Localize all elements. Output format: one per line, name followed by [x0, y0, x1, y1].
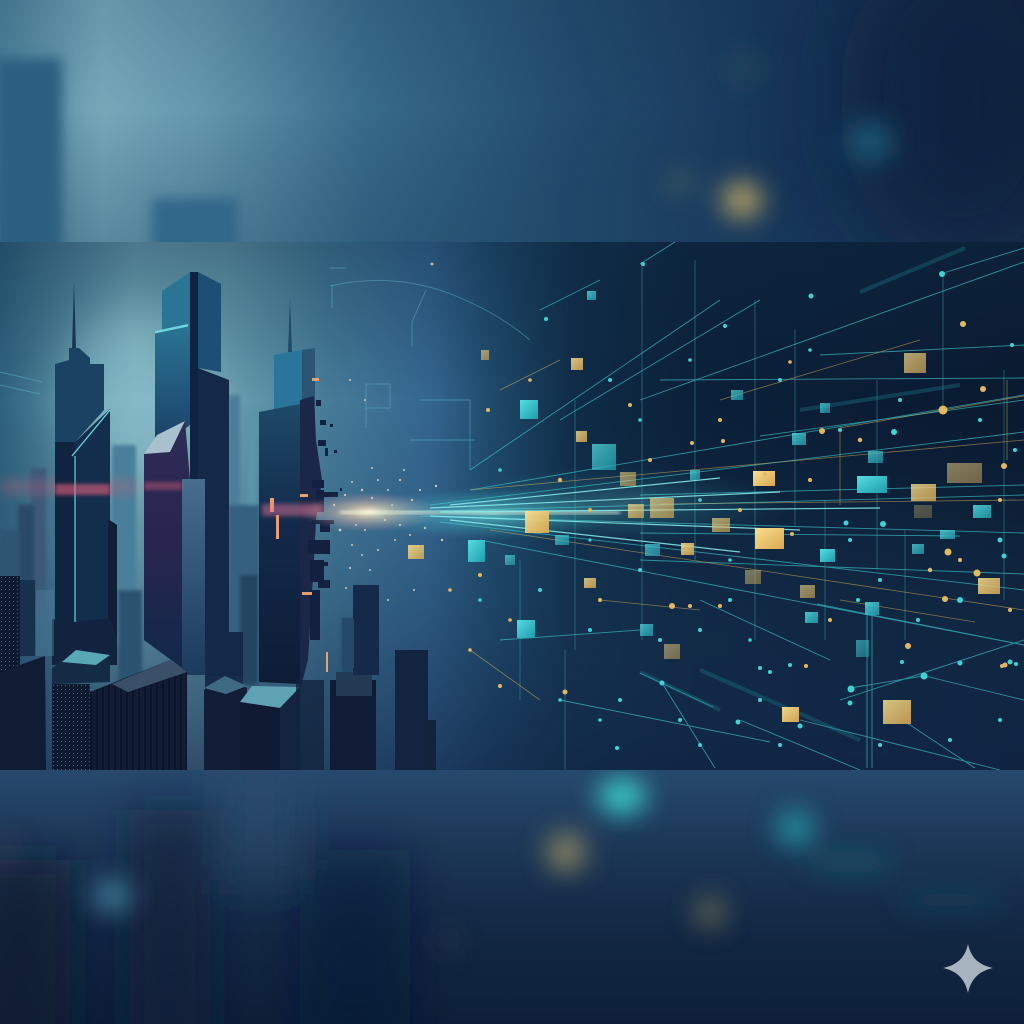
blurred buildings [0, 793, 415, 1016]
upper hazy data marks [0, 268, 530, 470]
central light streak [300, 467, 880, 552]
foreground dark buildings [0, 576, 436, 770]
gold nodes [448, 321, 1012, 694]
gold cubes [408, 350, 1000, 724]
distant hazy skyline [0, 395, 356, 690]
blurred lights [666, 50, 892, 218]
blurred lights [0, 778, 1004, 954]
blurred towers [0, 58, 238, 258]
data network lines [400, 242, 1024, 770]
panel: blurred bottom band [0, 770, 1024, 1024]
haze glow behind towers [65, 310, 205, 490]
panel: main city-to-data image [0, 242, 1024, 770]
teal cubes [468, 291, 991, 657]
dissolving particle cloud [333, 263, 443, 601]
icon: left skyscraper [52, 282, 117, 665]
data nodes [448, 262, 1018, 750]
data cubes [408, 291, 1000, 724]
icon: sparkle watermark [943, 944, 993, 993]
icon: dissolving right skyscraper [259, 298, 342, 690]
pink glow band [0, 480, 135, 494]
blurred dark mass [842, 0, 1024, 242]
teal nodes [478, 262, 1018, 750]
thick faded beams [640, 248, 965, 740]
icon: central skyscraper [144, 272, 243, 690]
panel: blurred top band [0, 0, 1024, 242]
